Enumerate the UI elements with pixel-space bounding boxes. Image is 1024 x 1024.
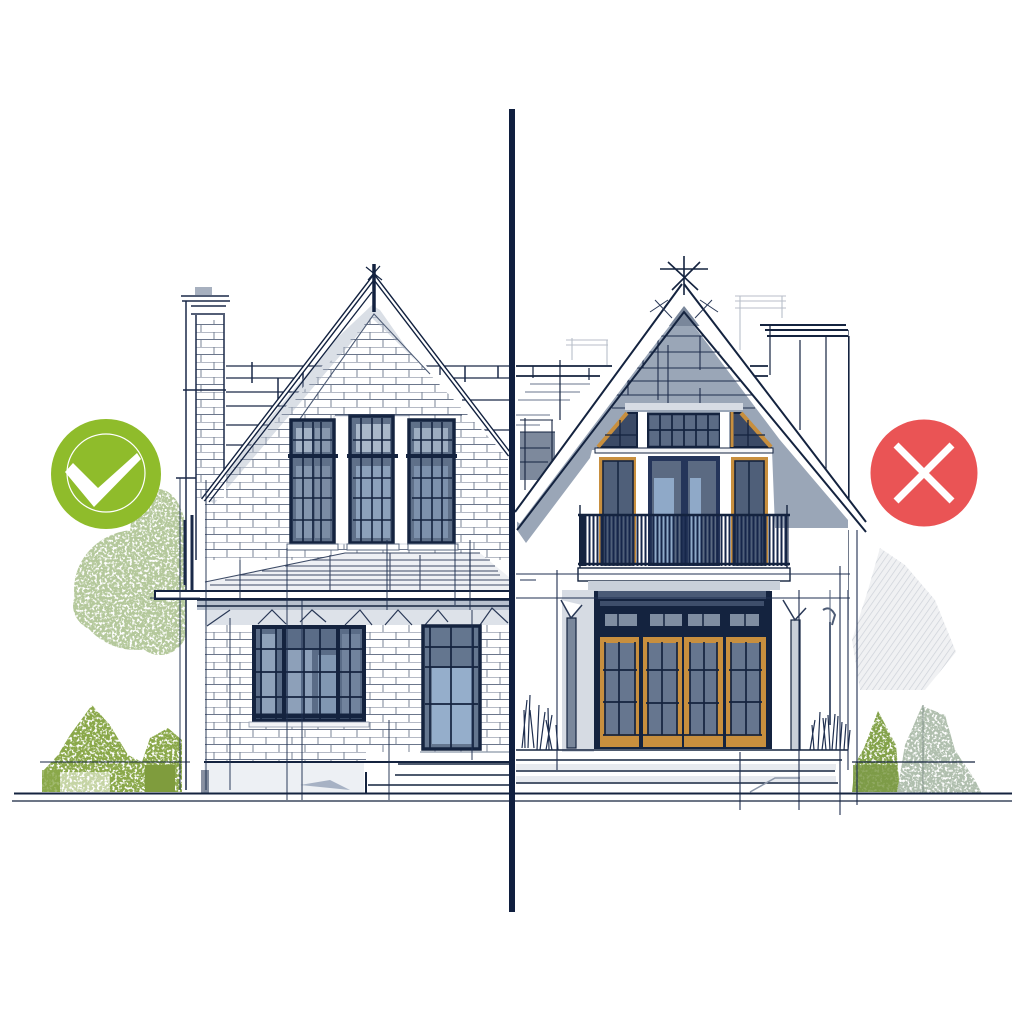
right house: construction lines [516,530,857,815]
right house: gable grey cladding [517,310,848,543]
left house: construction lines [150,415,472,800]
right house: balcony slab [578,568,790,591]
gable window: right triangle [731,412,771,447]
left house: porch roof [155,553,510,626]
right house: steps [516,750,848,793]
door glass panes [605,643,760,734]
right house: cladding lines [600,336,755,408]
left house: door [423,626,480,749]
left house: back roof lines [226,362,510,475]
right house: columns [561,600,835,750]
tree: left green sketch [73,489,198,655]
left house [150,264,510,800]
porch truss details [207,608,508,626]
tree: right faded grey sketch [852,548,956,690]
left house: plinth and steps [204,752,510,793]
window: upper middle [347,416,398,543]
balcony window: left wood frame [599,457,636,565]
right house: wall [518,300,860,752]
transom lights [605,614,759,626]
right house [515,256,866,815]
icon: green check [51,419,161,529]
left house: main wall and gable [204,308,510,765]
bush: right green and grey shrubs [852,705,982,794]
ground lines [12,762,1012,801]
window sills [287,544,458,550]
right house: back roof lines [516,330,848,620]
window: upper right [406,420,457,543]
right house: dormer behind roof [520,418,555,490]
right house: balcony level windows [599,456,768,566]
right house: wall shading beside doors [562,590,594,752]
gable window: left triangle [598,413,637,447]
right house: chimney [760,325,849,530]
right house: ground floor doors [594,591,772,749]
balcony window: centre door [648,456,720,566]
bush: left green shrubs [42,705,182,792]
gable window: centre [648,414,720,447]
right house: balcony railing [578,505,790,568]
left house: lower window [249,627,369,727]
left house: main roof rafters [203,264,510,502]
window: upper left [288,420,338,543]
left house: chimney [176,287,230,795]
right house: grass tufts [522,695,850,750]
left house: upper windows [287,416,458,550]
right house: upper gable windows [595,403,773,567]
icon: red cross [870,420,978,526]
right house: main roof rafters [515,256,866,532]
wood door frames [600,637,766,747]
right house: faded background chimneys [566,296,786,365]
centre divider [509,109,515,912]
balcony window: right wood frame [731,457,768,565]
left house: gable shading [205,305,415,504]
